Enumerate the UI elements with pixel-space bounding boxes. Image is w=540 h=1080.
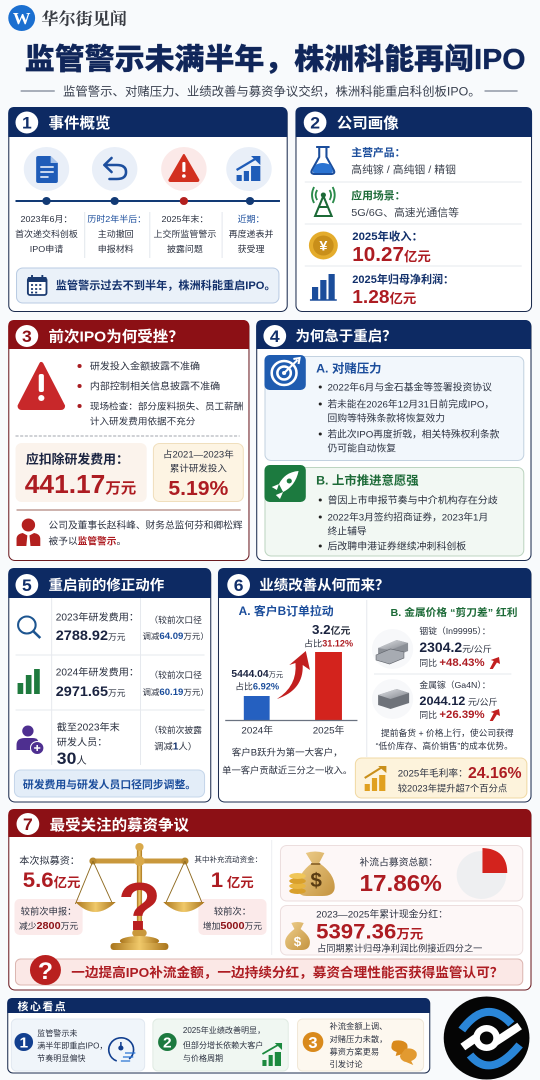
price: gallium: 同比 +26.39% <box>419 709 485 721</box>
icon: scale with question mark <box>75 843 205 950</box>
callout: 口径同步调整 <box>14 770 205 797</box>
card: 对赌压力 <box>264 355 524 460</box>
2023 R&D expense <box>56 611 139 644</box>
heading: 事件概览: 事件概览 <box>49 114 111 132</box>
heading: 重启前的修正动作: 5 <box>22 575 32 595</box>
timeline <box>15 197 280 205</box>
card: 节奏偏快 <box>11 1019 145 1071</box>
card: 业绩依赖: 2 <box>163 1035 172 1051</box>
logo: round black eye mark <box>444 996 529 1080</box>
card: 上市推进意愿强: 后改聘申港证券继续冲刺科创板 <box>327 540 466 552</box>
heading: 重启前的修正动作: 重启前的修正动作 <box>49 576 164 594</box>
bar chart: 客户B订单拉动: 2024年 <box>241 725 273 736</box>
heading: 公司画像: 公司画像 <box>337 114 399 132</box>
stat: 补充流动资金: 其中补充流动资金： <box>194 854 262 864</box>
warning note: 被予以监管警示。 <box>49 536 126 547</box>
card: 上市推进意愿强 <box>264 465 524 556</box>
stat card: 累计现金分红: 5397.36万元 <box>316 919 423 943</box>
heading: 为何急于重启: 为何急于重启？ <box>295 327 397 345</box>
2023 adjustment: （较前次口径 <box>149 614 202 625</box>
product info: 高纯镓 / 高纯铟 / 精铟 <box>351 163 456 176</box>
card: 募资讨论: 引发讨论 <box>330 1059 363 1069</box>
callout: 重启IPO: 监管警示过去不到半年，株洲科能重启IPO。 <box>56 278 276 292</box>
brand logo: wallstreetcn: 华尔街见闻 <box>41 9 127 28</box>
2024 R&D expense: 2024年研发费用： <box>56 666 139 678</box>
card: 对赌压力: 若此次IPO再度折戟，相关特殊权利条款 <box>327 429 500 440</box>
timeline step 3: 上交所监管警示 <box>154 228 216 239</box>
banner: 核心问题: 一边提高IPO补流金额，一边持续分红，募资合理性能否获得监管认可？ <box>71 964 503 980</box>
stat: share of R&D: 累计研发投入 <box>170 463 227 473</box>
icon: small money bag <box>285 922 310 950</box>
reasons list: 计入研发费用依据不充分 <box>90 416 196 427</box>
card: 节奏偏快: 监管警示未 <box>37 1028 78 1038</box>
callout: 较前次申报: 减少2800万元 <box>19 920 79 932</box>
banner: 核心问题: ? <box>38 958 53 985</box>
text: 第一大客户: 单一客户贡献近三分之一收入。 <box>222 764 352 775</box>
reasons list <box>77 360 243 427</box>
icon: small money bag: $ <box>294 934 302 949</box>
icon: magnifier <box>18 616 40 638</box>
heading: 业绩改善从何而来: 6 <box>234 575 244 595</box>
R&D headcount <box>57 721 120 768</box>
callout: 毛利率 <box>355 758 527 798</box>
icon: executive <box>17 518 40 546</box>
text: 成本优势: 提前备货 + 价格上行，使公司获得 <box>381 727 514 738</box>
bar chart: 客户B订单拉动 <box>225 604 357 736</box>
icon: flask <box>311 147 334 174</box>
icon: warning triangle <box>20 364 63 408</box>
2024 adjustment: （较前次口径 <box>149 669 202 680</box>
R&D headcount: 截至2023年末 <box>57 721 120 733</box>
stat card: 补流占比 <box>280 846 523 901</box>
icon: warning <box>161 147 207 191</box>
timeline step 2: 历时2年半后： <box>87 213 146 224</box>
R&D headcount: 研发人员： <box>57 736 107 748</box>
price: indium: 2304.2元/公斤 <box>419 640 492 655</box>
heading: 核心看点: 核心看点 <box>18 1000 67 1013</box>
icon: scale with question mark: ? <box>118 868 161 945</box>
headcount adjustment: 调减1人） <box>154 741 197 752</box>
callout: 较前次申报: 较前次申报： <box>21 906 76 916</box>
card: 业绩依赖: 与价格周期 <box>183 1053 223 1063</box>
icon: growth chart <box>226 147 272 191</box>
timeline step 4 <box>229 213 274 254</box>
product info <box>351 146 456 176</box>
stat: share of R&D: 5.19% <box>168 477 228 500</box>
panel: 重启前的修正动作 <box>8 568 211 802</box>
headcount adjustment <box>149 724 202 752</box>
panel: 公司画像 <box>295 107 532 312</box>
panel: 业绩改善从何而来 <box>218 568 531 802</box>
net profit <box>352 272 454 307</box>
callout: 较前次 <box>198 899 267 935</box>
card: 对赌压力: 2022年6月与金石基金等签署投资协议 <box>327 382 492 393</box>
timeline step 1: 首次递交科创板 <box>15 228 78 239</box>
icon: stopwatch <box>109 1038 135 1061</box>
panel: 为何急于重启 <box>256 320 531 560</box>
stat: 补充流动资金 <box>194 854 262 892</box>
icon: chat bubbles <box>391 1040 417 1065</box>
stat card: 补流占比: 补流占募资总额： <box>360 857 438 868</box>
icon: target <box>264 355 306 390</box>
timeline step 1: IPO申请 <box>30 243 63 254</box>
heading: 公司画像 <box>304 112 399 134</box>
callout: 毛利率: 较2023年提升超7个百分点 <box>398 783 507 793</box>
timeline step 4: 获受理 <box>238 243 265 254</box>
card: 节奏偏快: 1 <box>19 1035 29 1051</box>
callout: 较前次: 增加5000万元 <box>203 920 262 932</box>
card: 募资讨论: 募资方案更易 <box>330 1047 379 1056</box>
timeline step 4: 再度递表并 <box>229 228 274 239</box>
icon: antenna <box>312 187 335 216</box>
2024 adjustment: 调减60.19万元） <box>142 687 209 698</box>
price: indium <box>419 625 500 669</box>
icon: green growth <box>262 1043 282 1066</box>
card: 节奏偏快: 满半年即重启IPO， <box>37 1041 107 1050</box>
application info <box>351 189 459 219</box>
callout: 较前次: 较前次： <box>214 906 251 916</box>
arrow: growth <box>277 651 310 699</box>
2024 R&D expense <box>56 666 139 700</box>
card: 对赌压力: A. 对赌压力 <box>316 360 381 375</box>
card: 业绩依赖: 2025年业绩改善明显， <box>183 1025 265 1035</box>
card: 上市推进意愿强: 终止辅导 <box>327 526 367 537</box>
panel: 核心看点 <box>7 998 430 1073</box>
stat card: 累计现金分红: 2023—2025年累计现金分红： <box>316 909 448 920</box>
headcount adjustment: （较前次披露 <box>149 724 202 735</box>
heading: 事件概览: 1 <box>22 113 32 132</box>
price: indium: 铟锭（In99995）： <box>419 625 491 636</box>
panel: 募资争议 <box>8 809 531 990</box>
icon: money bag <box>289 852 335 896</box>
heading: 公司画像: 2 <box>310 113 320 132</box>
heading: 为何急于重启: 4 <box>270 326 280 346</box>
card: 业绩依赖: 但部分增长依赖大客户 <box>183 1040 263 1050</box>
timeline step 3: 披露问题 <box>167 243 203 254</box>
reasons list: 现场检查：部分废料损失、员工薪酬 <box>90 401 243 412</box>
brand logo: wallstreetcn: W <box>13 9 30 28</box>
2024 adjustment <box>142 669 209 698</box>
bar chart: 客户B订单拉动: 占比6.92% <box>235 681 279 691</box>
heading: 事件概览 <box>15 112 111 134</box>
callout: 较前次申报 <box>14 899 83 935</box>
callout: 毛利率: 24.16% <box>468 765 522 782</box>
icon: profit bars <box>310 274 337 300</box>
card: 对赌压力: 若未能在2026年12月31日前完成IPO， <box>327 399 494 410</box>
icon: green bars <box>18 669 40 694</box>
card: 对赌压力: 回购等特殊条款将恢复效力 <box>327 413 445 424</box>
timeline step 1: 2023年6月： <box>21 213 72 224</box>
price: gallium: 2044.12 元/公斤 <box>419 694 498 708</box>
2023 R&D expense: 2788.92万元 <box>56 628 126 644</box>
application info: 应用场景： <box>351 189 405 202</box>
timeline step 3: 2025年末： <box>161 213 208 224</box>
card: 上市推进意愿强: B. 上市推进意愿强 <box>316 472 419 487</box>
callout: 毛利率: 2025年毛利率： <box>398 768 468 779</box>
price: gallium <box>419 679 500 721</box>
heading: 金属价格: B. 金属价格 “剪刀差” 红利 <box>391 606 518 619</box>
net profit: 1.28亿元 <box>352 286 416 307</box>
text: 成本优势: “低价库存、高价销售”的成本优势。 <box>376 740 513 751</box>
timeline step 2: 申报材料 <box>98 243 134 254</box>
stat card: 补流占比: 17.86% <box>360 870 442 897</box>
warning note: 公司及董事长赵科峰、财务总监何芬和卿松辉 <box>49 520 243 531</box>
2023 adjustment: 调减64.09万元） <box>142 631 209 642</box>
panel: 前次IPO为何受挫 <box>8 320 249 560</box>
card: 募资讨论 <box>298 1019 424 1071</box>
bar chart: 客户B订单拉动: 占比31.12% <box>304 638 353 648</box>
warning note <box>49 520 243 547</box>
heading: 业绩改善从何而来 <box>227 574 389 596</box>
icon: yuan coin <box>309 232 338 260</box>
revenue: 2025年收入： <box>352 229 423 243</box>
title: 监管警示未满半年，株洲科能再闯IPO <box>25 42 526 76</box>
card: 募资讨论: 补流金额上调、 <box>330 1021 387 1031</box>
heading: 募资争议 <box>17 813 190 835</box>
timeline step 2: 主动撤回 <box>98 228 134 239</box>
product info: 主营产品： <box>351 146 405 159</box>
stat: share of R&D <box>153 444 243 502</box>
timeline step 2 <box>87 213 146 254</box>
text: 成本优势 <box>376 727 514 751</box>
card: 对赌压力: 仍可能自动恢复 <box>327 443 396 454</box>
revenue <box>352 229 431 266</box>
heading: 募资争议: 7 <box>23 814 33 834</box>
2024 R&D expense: 2971.65万元 <box>56 684 126 700</box>
banner: 核心问题 <box>15 955 523 985</box>
card: 募资讨论: 3 <box>308 1034 318 1052</box>
reasons list: 研发投入金额披露不准确 <box>90 360 200 372</box>
subtitle: 监管警示、对赌压力、业绩改善与募资争议交织，株洲科能重启科创板IPO。 <box>63 83 481 98</box>
icon: undo arrow <box>92 147 137 191</box>
bar chart: 客户B订单拉动: 3.2亿元 <box>312 622 351 637</box>
icon: indium ingot <box>372 629 413 669</box>
heading: 业绩改善从何而来: 业绩改善从何而来？ <box>259 576 389 594</box>
heading: 为何急于重启 <box>263 325 397 347</box>
callout: 口径同步调整: 研发费用与研发人员口径同步调整。 <box>23 778 196 791</box>
2023 R&D expense: 2023年研发费用： <box>56 611 139 623</box>
heading: 重启前的修正动作 <box>15 574 164 596</box>
card: 募资讨论: 对赌压力未散， <box>330 1034 387 1044</box>
application info: 5G/6G、高速光通信等 <box>351 206 459 219</box>
2023 adjustment <box>142 614 209 642</box>
brand logo: wallstreetcn <box>8 5 127 31</box>
pie chart: 17.86% <box>457 848 507 899</box>
price: gallium: 金属镓（Ga4N）： <box>419 679 491 690</box>
icon: researcher <box>17 726 44 754</box>
stat: 拟募资 <box>19 854 80 892</box>
bar chart: 客户B订单拉动: 2025年 <box>313 725 345 736</box>
icon: document <box>24 147 69 191</box>
R&D headcount: 30人 <box>57 748 87 768</box>
bar chart: 客户B订单拉动: A. 客户B订单拉动 <box>239 604 334 618</box>
card: 节奏偏快: 节奏明显偏快 <box>37 1053 86 1063</box>
stat: deducted R&D: 441.17万元 <box>25 471 136 499</box>
callout: 重启IPO <box>17 268 279 303</box>
heading: 前次IPO为何受挫 <box>15 325 184 347</box>
icon: money bag: $ <box>310 870 323 892</box>
card: 上市推进意愿强: 2022年3月签约招商证券，2023年1月 <box>327 512 488 523</box>
heading: 前次IPO为何受挫: 前次IPO为何受挫？ <box>49 328 184 345</box>
heading: 前次IPO为何受挫: 3 <box>22 326 32 346</box>
stat: share of R&D: 占2021—2023年 <box>163 449 234 459</box>
icon: rocket <box>264 465 306 502</box>
icon: gold growth <box>365 766 386 791</box>
stat: 补充流动资金: 1 亿元 <box>211 867 254 892</box>
panel: 事件概览 <box>8 107 287 312</box>
text: 第一大客户 <box>222 746 352 775</box>
revenue: 10.27亿元 <box>352 244 431 266</box>
icon: gallium ingot <box>372 679 413 719</box>
reasons list: 内部控制相关信息披露不准确 <box>90 380 220 392</box>
timeline step 4: 近期： <box>238 213 265 224</box>
stat: 拟募资: 5.6亿元 <box>23 867 80 892</box>
price: indium: 同比 +48.43% <box>419 657 485 669</box>
timeline step 1 <box>15 213 78 254</box>
icon: yuan coin: ¥ <box>319 239 327 254</box>
timeline step 3 <box>154 213 216 254</box>
stat card: 累计现金分红: 占同期累计归母净利润比例接近四分之一 <box>317 943 482 953</box>
card: 业绩依赖 <box>153 1019 288 1071</box>
heading: 募资争议: 最受关注的募资争议 <box>50 816 190 834</box>
stat: 拟募资: 本次拟募资： <box>19 854 80 867</box>
card: 上市推进意愿强: 曾因上市申报节奏与中介机构存在分歧 <box>327 494 498 506</box>
net profit: 2025年归母净利润： <box>352 272 454 286</box>
text: 第一大客户: 客户B跃升为第一大客户， <box>232 746 343 757</box>
stat: deducted R&D: 应扣除研发费用： <box>26 452 129 466</box>
stat: deducted R&D <box>15 443 147 502</box>
bar chart: 客户B订单拉动: 5444.04万元 <box>231 669 283 680</box>
stat card: 累计现金分红 <box>280 906 523 955</box>
